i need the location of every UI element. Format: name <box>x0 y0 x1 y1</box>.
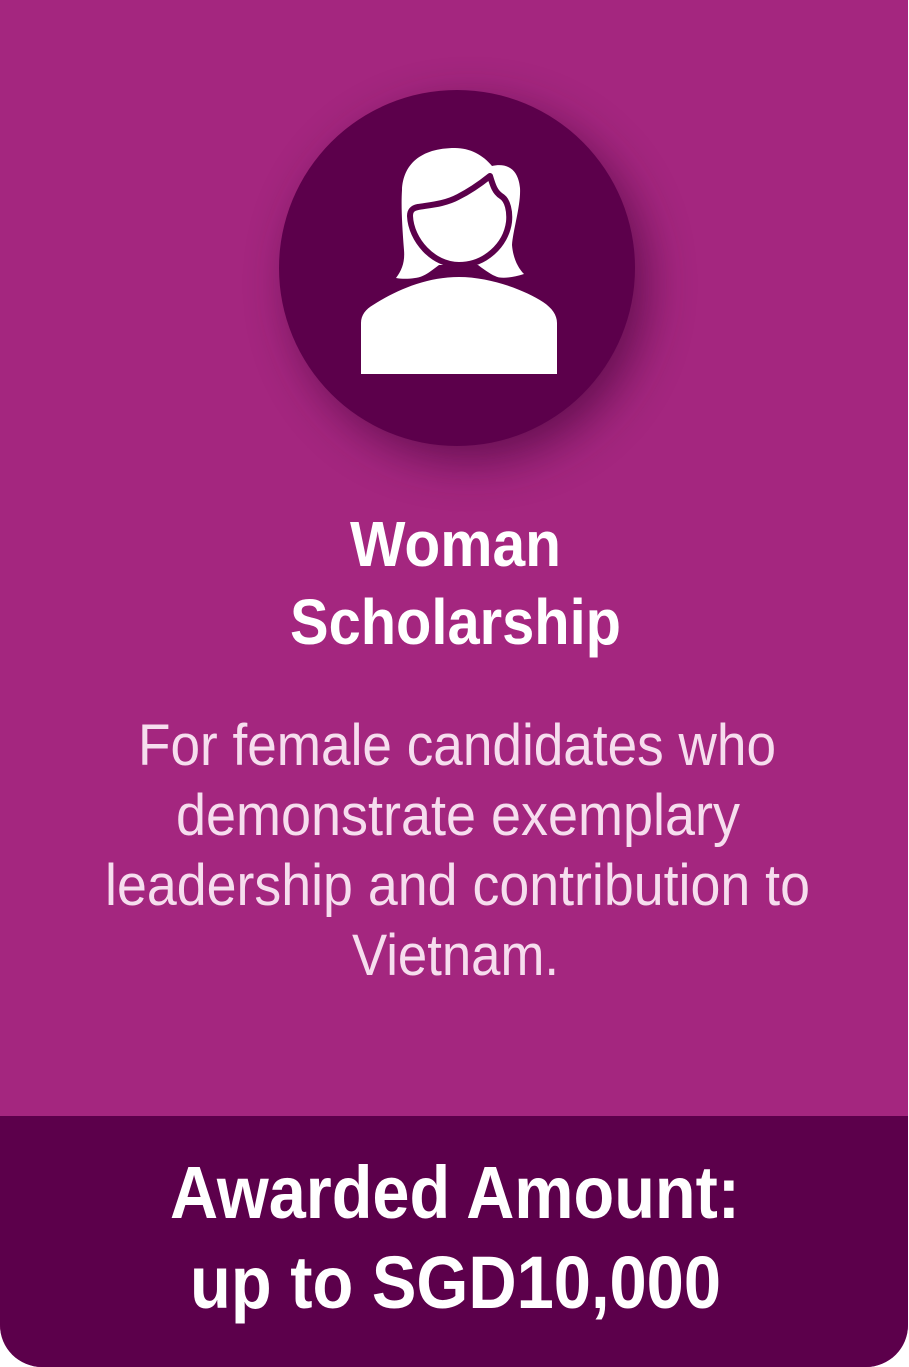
description text: For female candidates who <box>138 713 776 778</box>
description text: Vietnam. <box>352 923 559 988</box>
panel: awarded amount footer <box>0 1116 908 1367</box>
description text: demonstrate exemplary <box>176 783 740 848</box>
awarded amount text <box>170 1151 740 1324</box>
description text: leadership and contribution to <box>105 853 810 918</box>
heading <box>290 508 621 658</box>
icon: woman in circle <box>279 90 646 460</box>
description text <box>105 713 810 988</box>
heading: Woman <box>350 508 561 580</box>
awarded amount text: up to SGD10,000 <box>190 1241 721 1324</box>
heading: Scholarship <box>290 586 621 658</box>
awarded amount text: Awarded Amount: <box>170 1151 740 1234</box>
